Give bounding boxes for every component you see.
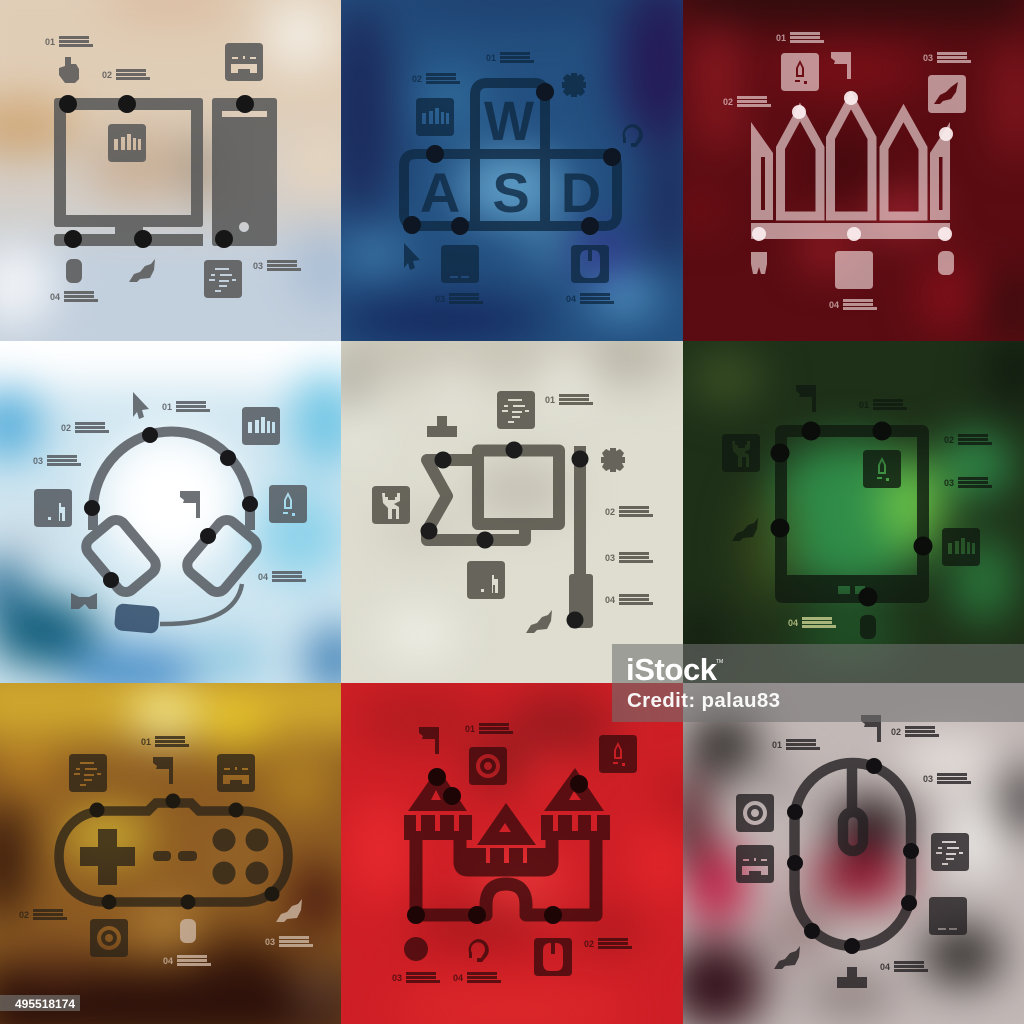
label 04 [788,617,836,628]
d-pad [80,829,135,885]
icon: chart square [108,124,146,162]
panel: red castle background [341,683,692,1024]
panel: yellow gamepad background [0,683,341,1024]
icon: flag [861,715,881,742]
label 02 [944,434,992,445]
icon: mouse [860,615,876,639]
label 03: 03 [265,937,275,947]
watermark logo: iStock [626,652,718,687]
label 02: 02 [944,435,954,445]
icon: device square [34,489,72,527]
icon: swirl square [69,754,107,792]
trademark mark: TM [716,659,723,665]
icon: gear [601,448,625,472]
icon: bird [129,259,155,282]
computer infographic [45,36,301,302]
label 04 [258,571,306,582]
icon: landscape square [217,754,255,792]
label 04: 04 [788,618,798,628]
label 03 [392,972,440,983]
icon: cursor [133,392,149,419]
crown and icons [723,32,971,310]
panel: red crown background [680,0,1024,341]
headphones and icons [33,392,307,634]
node dots [787,758,919,954]
castle and icons [392,723,637,983]
label 04 [880,961,928,972]
icon: hand [59,57,79,83]
key letters: S [492,161,530,224]
WASD key outlines [404,83,617,226]
watermark credit: Credit: palau83 [627,689,780,712]
panel: grey tablet background [330,320,683,683]
node dots [407,768,588,924]
icon: mouse [66,259,82,283]
icon: plain square [835,251,873,289]
label 02: 02 [61,423,71,433]
icon: landscape square [225,43,263,81]
controller outline [59,803,288,902]
label 01 [772,739,820,750]
label 03: 03 [605,553,615,563]
label 02 [412,73,460,84]
label 01: 01 [162,402,172,412]
label 04: 04 [566,294,576,304]
castle walls [416,838,596,915]
label 04: 04 [258,572,268,582]
label 04: 04 [829,300,839,310]
label 04 [50,291,98,302]
icon: mouth [71,593,97,609]
label 02: 02 [723,97,733,107]
label 04: 04 [453,973,463,983]
key letters: A [420,161,460,224]
icon: chart square [242,407,280,445]
headphones infographic [33,392,307,634]
label 01 [162,401,210,412]
icon: swirl square [931,833,969,871]
icon: flag [419,727,439,754]
label 02: 02 [412,74,422,84]
icon: mouse [938,251,954,275]
keys and icons [404,52,643,304]
centre battlements [466,848,546,866]
label 02 [584,938,632,949]
label 04 [453,972,501,983]
node dots [90,794,280,910]
icon: mouse [180,919,196,943]
icon: bars square [416,98,454,136]
tablet body [775,425,929,603]
microphone [114,603,160,634]
right roof [544,768,604,811]
label 02: 02 [605,507,615,517]
castle infographic [392,723,637,983]
label 01: 01 [465,724,475,734]
computer shapes and icons [45,36,301,302]
label 01 [45,36,93,47]
icon: tooth [751,252,767,274]
icon: bird [732,518,758,541]
pale icons and labels [163,899,313,966]
monitor [54,98,203,246]
panel: beige computer background [0,0,341,341]
node dots [752,91,953,241]
tablet infographic [722,385,992,639]
label 01 [141,736,189,747]
crown spires [780,100,923,216]
centre roof [477,803,536,845]
label 01 [859,399,907,410]
label 03: 03 [253,261,263,271]
icon: cursor [404,243,420,270]
label 02 [891,726,939,737]
label 03 [923,773,971,784]
key letters: D [561,161,601,224]
icon: flag [796,385,816,412]
stylus handle [569,574,593,628]
label 04: 04 [50,292,60,302]
icon: mouse square [571,245,609,283]
icon: gear square [90,919,128,957]
icon: tablet square [929,897,967,935]
mouse outline and wheel [794,763,911,946]
node dots [770,422,932,606]
crown infographic [723,32,971,310]
icon: podium [837,967,867,988]
icon: rocket square [599,735,637,773]
icon: podium [427,416,457,437]
label 04: 04 [605,595,615,605]
label 02 [61,422,109,433]
label 03: 03 [923,774,933,784]
icon: landscape square [736,845,774,883]
icon: rocket square [781,53,819,91]
icon: face [404,937,428,961]
label 01 [465,723,513,734]
node dots [59,95,254,248]
label 03 [33,455,81,466]
icon: bird [774,946,800,969]
label 02: 02 [584,939,594,949]
label 01 [776,32,824,43]
label 03: 03 [944,478,954,488]
keyboard infographic [403,52,643,304]
crown side points [751,122,950,220]
icon: gear [562,73,586,97]
label 02 [102,69,150,80]
icon: swirl square [204,260,242,298]
icon: wing [276,899,302,922]
tablet and icons [722,385,992,639]
icon: mouse square [534,938,572,976]
icon: swirl square [497,391,535,429]
image id tag [0,995,80,1011]
label 03 [923,52,971,63]
label 03 [253,260,301,271]
devices infographic [372,391,653,633]
panel: green tablet background [675,330,1024,683]
label 02 [723,96,771,107]
label 02: 02 [19,910,29,920]
left battlements [404,815,472,840]
crown base [751,223,950,239]
label 04: 04 [163,956,173,966]
label 03: 03 [392,973,402,983]
label 01 [486,52,534,63]
mouse and icons [736,715,971,988]
icon: castle square [722,434,760,472]
right battlements [541,815,610,840]
label 03 [944,477,992,488]
icon: flag [180,491,200,518]
label 01: 01 [776,33,786,43]
node dots [420,442,588,628]
label 03: 03 [33,456,43,466]
icon: bird [526,610,552,633]
tower phone [212,98,277,246]
icon: gear square [469,747,507,785]
label 03: 03 [923,53,933,63]
label 04 [829,299,877,310]
panel: dark mouse background [666,683,1024,1024]
label 02 [19,909,67,920]
panel: sky-blue headphones background [0,341,341,683]
action buttons [212,828,268,884]
mouse infographic [736,715,971,988]
headband and ear cups [82,432,261,596]
mic cable [160,584,242,624]
icon: wing square [928,75,966,113]
icon: flag [831,52,851,79]
label 04: 04 [880,962,890,972]
label 04 [566,293,614,304]
label 02 [605,506,653,517]
center buttons [153,851,197,861]
label 04 [163,955,211,966]
icon: flag [153,757,173,784]
gamepad infographic [19,736,313,966]
label 01: 01 [486,53,496,63]
watermark band [612,644,1024,722]
icon: chart square [942,528,980,566]
gamepad and icons [19,736,288,957]
panel: blue keyboard background [341,0,683,341]
label 03: 03 [435,294,445,304]
label 01 [545,394,593,405]
label 04 [605,594,653,605]
icon: castle square [372,486,410,524]
left roof [408,768,467,811]
label 01: 01 [141,737,151,747]
key letters: W [484,89,534,152]
icon: headset [469,939,489,962]
label 02: 02 [102,70,112,80]
icon: device square [467,561,505,599]
label 01: 01 [859,400,869,410]
label 01: 01 [545,395,555,405]
label 03 [265,936,313,947]
image id tag: 495518174 [15,997,75,1011]
node dots [403,83,621,235]
label 02: 02 [891,727,901,737]
devices and icons [372,391,653,633]
icon: headset [623,124,643,147]
screen and chevron outlines [427,446,580,580]
icon: rocket square [269,485,307,523]
node dots [84,427,258,588]
icon: tablet square [441,245,479,283]
label 01: 01 [772,740,782,750]
icon: rocket square [863,450,901,488]
label 01: 01 [45,37,55,47]
icon: gear square [736,794,774,832]
label 03 [605,552,653,563]
key letters [420,89,601,224]
label 03 [435,293,483,304]
